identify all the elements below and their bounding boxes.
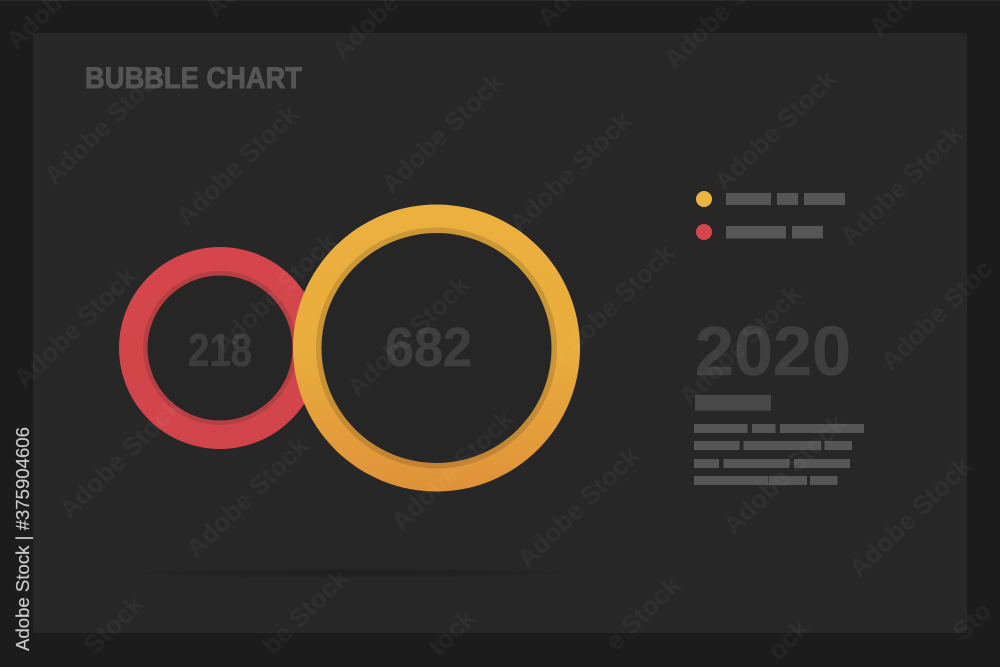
bubble: yellow 682: [293, 204, 580, 492]
watermarks: tock: [422, 603, 482, 662]
watermarks: Adobe Stock: [375, 66, 510, 199]
watermarks: Adobe Stock: [341, 269, 476, 402]
watermarks: Adobe Stock: [717, 407, 852, 540]
watermarks: be Stock: [256, 563, 355, 660]
watermarks: Adobe Stock: [673, 278, 808, 411]
watermarks: Adobe Stock: [208, 226, 343, 359]
chart ground shadow: [115, 568, 585, 578]
watermarks: Adobe Stock: [385, 403, 520, 536]
watermarks: Adobe Stock: [834, 118, 969, 251]
bubble: red 218: [119, 247, 321, 449]
watermarks: Adobe Stock: [708, 63, 843, 196]
bubble: red 218: 218: [188, 324, 252, 376]
year: 2020: [695, 312, 851, 390]
title: BUBBLE CHART: [85, 62, 302, 95]
watermarks: Adobe Stock: [503, 105, 638, 238]
body text placeholder: [694, 424, 864, 485]
watermarks: e Stock: [599, 570, 687, 656]
watermarks: Stock: [78, 589, 150, 660]
watermarks: Adobe Stock: [180, 430, 315, 563]
watermarks: Adobe Stock: [511, 440, 646, 573]
watermarks: Adobe Stock: [843, 450, 978, 583]
bubble: yellow 682: 682: [385, 316, 472, 378]
watermarks: Adobe Stock: [546, 237, 681, 370]
legend item: red: [696, 224, 823, 240]
watermarks: Adobe Stoc: [874, 254, 998, 376]
subtitle placeholder: [695, 395, 771, 410]
watermarks: ock: [761, 613, 815, 666]
watermarks: Adobe Stock: [170, 98, 305, 231]
watermarks: Adobe Stock: [8, 260, 143, 393]
legend item: yellow: [696, 191, 845, 207]
watermarks: Sto: [946, 596, 997, 646]
watermarks: Adobe Stock: [53, 391, 188, 524]
legend: [696, 191, 845, 240]
stock id vertical text: Adobe Stock | #375904606: [13, 427, 33, 651]
watermarks: Adobe Stock: [38, 57, 173, 190]
